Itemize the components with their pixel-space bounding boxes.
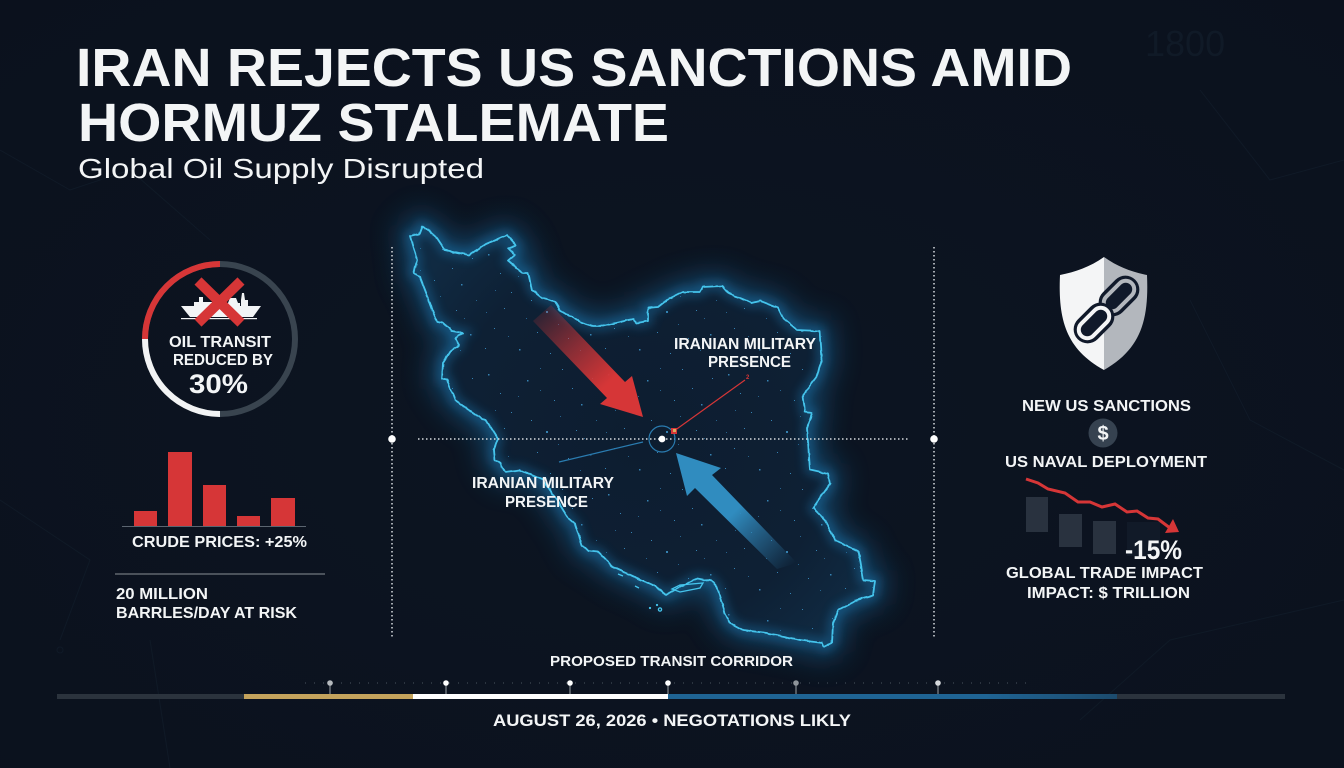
icon: tanker ship [181,293,261,319]
callout: Iranian military presence upper: PRESENCE [708,354,791,371]
dotted guide frame [392,247,934,637]
leader line: blue callout [559,442,643,462]
arrow: blue, pointing to strait [676,453,797,569]
barrels at risk text [116,586,297,622]
callout: Iranian military presence upper: IRANIAN MILITARY [674,336,816,353]
corridor label: PROPOSED TRANSIT CORRIDOR [550,654,794,670]
background faint numerals: 1800 [1145,23,1225,64]
date and outlook line: AUGUST 26, 2026 • NEGOTATIONS LIKLY [493,711,852,730]
title [76,38,1072,153]
global trade impact text [1006,565,1203,602]
leader line: red callout: 2 [746,375,750,381]
trade decline chart [1026,479,1179,556]
map: Iran outline [410,226,875,647]
bar chart: crude prices [122,452,306,527]
title: HORMUZ STALEMATE [78,93,669,153]
icon: dollar badge [1088,418,1118,448]
gauge text [169,334,273,399]
donut gauge with ship icon [145,264,295,414]
gauge text: REDUCED BY [173,352,273,369]
barrels at risk text: BARRLES/DAY AT RISK [116,605,297,622]
minus 15 percent figure: -15% [1125,535,1182,565]
islands [618,574,703,611]
arrow: red, pointing to strait [533,305,643,417]
timeline [57,680,1285,699]
icon: red cross [198,281,241,323]
subtitle: Global Oil Supply Disrupted [78,153,484,184]
callout: Iranian military presence lower: PRESENCE [505,494,588,511]
panel: right statistics [1005,257,1207,602]
callout: Iranian military presence lower [472,475,614,511]
icon: shield with chain link [1060,257,1147,370]
guide nodes [388,426,938,452]
crude prices label: CRUDE PRICES: +25% [132,534,307,551]
global trade impact text: IMPACT: $ TRILLION [1027,585,1190,602]
barrels at risk text: 20 MILLION [116,586,208,603]
icon: chain links [1068,270,1145,349]
leader line: red callout [671,375,750,434]
gauge text: 30% [189,369,248,399]
title: IRAN REJECTS US SANCTIONS AMID [76,38,1072,98]
new US sanctions label: NEW US SANCTIONS [1022,398,1191,415]
icon: dollar badge: $ [1097,423,1109,445]
global trade impact text: GLOBAL TRADE IMPACT [1006,565,1203,582]
US naval deployment label: US NAVAL DEPLOYMENT [1005,454,1207,471]
timeline markers [330,683,938,694]
callout: Iranian military presence lower: IRANIAN MILITARY [472,475,614,492]
panel: left statistics [115,264,325,622]
callout: Iranian military presence upper [674,336,816,371]
gauge text: OIL TRANSIT [169,334,271,351]
